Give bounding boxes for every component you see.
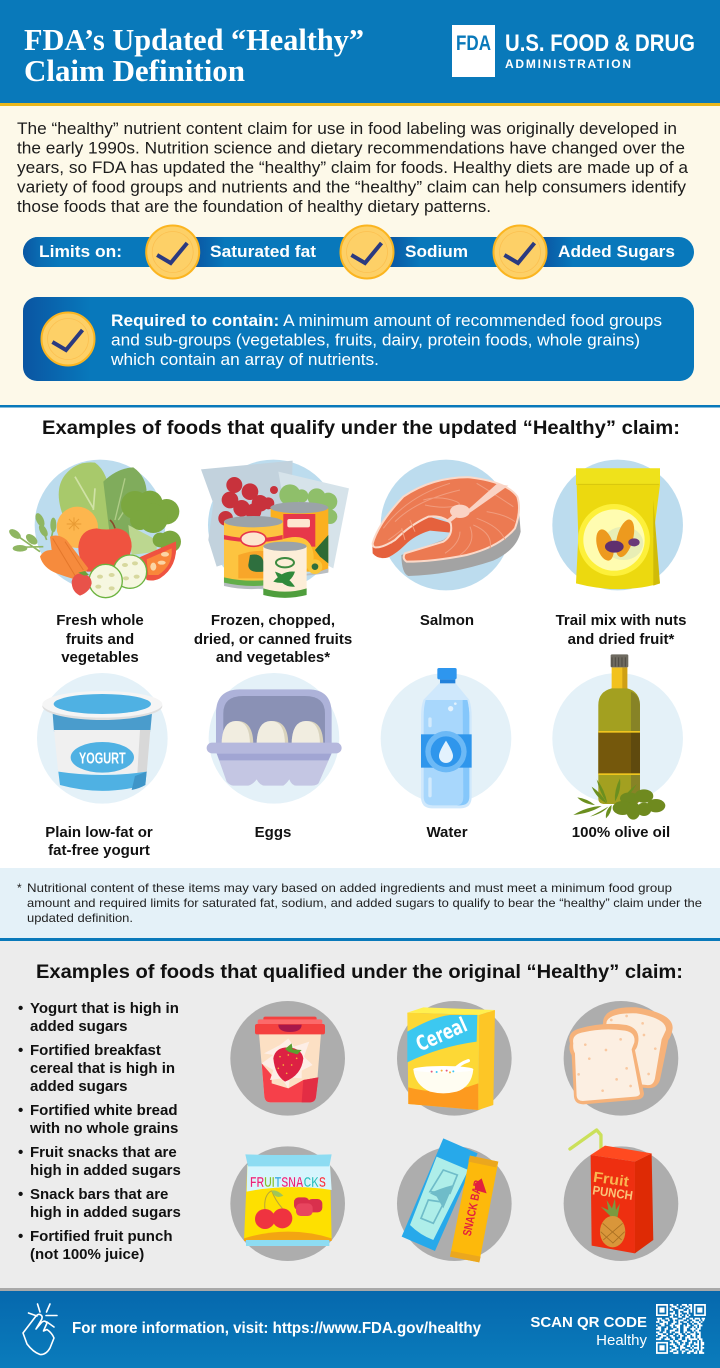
bullet list: • bbox=[18, 1102, 23, 1119]
label: frozen and canned: dried, or canned fruits bbox=[194, 631, 352, 648]
QR caption: SCAN QR CODE bbox=[530, 1314, 647, 1331]
limits bar: Saturated fat bbox=[210, 242, 316, 261]
footnote: Nutritional content of these items may vary based on added ingredients and must meet a minimum food group bbox=[27, 881, 672, 895]
bullet list: high in added sugars bbox=[30, 1162, 181, 1179]
icon: yogurt: YOGURT bbox=[79, 750, 126, 767]
label: yogurt bbox=[45, 824, 153, 859]
FDA logo bbox=[452, 25, 695, 77]
bullet list: • bbox=[18, 1144, 23, 1161]
label: frozen and canned: and vegetables* bbox=[216, 649, 330, 666]
bullet list: Snack bars that are bbox=[30, 1186, 168, 1203]
heading: original claim: Examples of foods that qualified under the original “Healthy” claim: bbox=[36, 961, 683, 983]
icon: olive oil bbox=[552, 654, 683, 820]
heading: updated claim: Examples of foods that qualify under the updated “Healthy” claim: bbox=[42, 417, 680, 439]
label: water: Water bbox=[426, 824, 468, 841]
icon: cereal box: Cereal bbox=[412, 1013, 471, 1056]
small can bbox=[263, 547, 307, 592]
icon: finger snap hand bbox=[23, 1304, 57, 1355]
label: eggs: Eggs bbox=[255, 824, 291, 841]
QR caption bbox=[530, 1314, 648, 1349]
bullet list: • bbox=[18, 1228, 23, 1245]
icon: yogurt bbox=[37, 673, 168, 804]
bullet list: • bbox=[18, 1000, 23, 1017]
icon: cereal box bbox=[397, 1001, 512, 1116]
panel: definition bbox=[0, 106, 720, 405]
icon: check saturated fat bbox=[146, 226, 199, 278]
icon: trail mix bbox=[552, 460, 683, 590]
icon: white bread bbox=[564, 1001, 678, 1116]
FDA logo: FDA bbox=[456, 32, 491, 55]
limits bar bbox=[23, 226, 694, 278]
panel: original healthy foods bbox=[0, 941, 720, 1288]
bullet list: Yogurt that is high in bbox=[30, 1000, 179, 1017]
bullet list: • bbox=[18, 1186, 23, 1203]
limits bar: Added Sugars bbox=[558, 242, 675, 261]
icon: check added sugars bbox=[494, 226, 546, 278]
label: trail mix: and dried fruit* bbox=[568, 631, 674, 648]
icon: sweetened yogurt cup bbox=[230, 1001, 345, 1116]
bullet list: cereal that is high in bbox=[30, 1060, 175, 1077]
required to contain box: and sub-groups (vegetables, fruits, dairy, protein foods, whole grains) bbox=[111, 330, 640, 350]
label: yogurt: Plain low-fat or bbox=[45, 824, 153, 841]
icon: check required bbox=[42, 312, 94, 366]
label: fresh produce: vegetables bbox=[61, 649, 139, 666]
label: salmon: Salmon bbox=[420, 612, 474, 629]
icon: water bottle bbox=[381, 668, 511, 808]
limits bar: Sodium bbox=[405, 242, 468, 261]
label: frozen and canned: Frozen, chopped, bbox=[211, 612, 335, 629]
bullet list: Fortified breakfast bbox=[30, 1042, 161, 1059]
label: trail mix: Trail mix with nuts bbox=[556, 612, 686, 629]
label: fresh produce: Fresh whole bbox=[56, 612, 144, 629]
label: trail mix bbox=[556, 612, 686, 648]
title: Claim Definition bbox=[24, 54, 245, 88]
icon: eggs bbox=[207, 673, 342, 804]
required to contain box: Required to contain: A minimum amount of recommended food groups bbox=[111, 311, 662, 330]
header banner bbox=[0, 0, 720, 106]
icon: frozen and canned produce bbox=[201, 460, 349, 598]
title bbox=[24, 23, 364, 88]
QR caption: Healthy bbox=[596, 1332, 648, 1349]
intro paragraph: years, so FDA has updated the “healthy” claim for foods. Healthy diets are made up of a bbox=[17, 158, 689, 177]
footnote: * bbox=[17, 881, 22, 895]
FDA logo: ADMINISTRATION bbox=[505, 57, 631, 71]
icon: fruit snacks bbox=[230, 1146, 345, 1261]
label: frozen and canned bbox=[194, 612, 352, 666]
bullet list: • bbox=[18, 1042, 23, 1059]
icon: check sodium bbox=[340, 226, 394, 278]
icon: fruit punch box: Fruit bbox=[592, 1170, 630, 1191]
required to contain box bbox=[23, 297, 694, 381]
footnote bbox=[0, 868, 720, 941]
bullet list: (not 100% juice) bbox=[30, 1246, 144, 1263]
limits bar: Limits on: bbox=[39, 242, 122, 261]
icon: snack bars: SNACK BAR bbox=[460, 1179, 485, 1237]
title: FDA’s Updated “Healthy” bbox=[24, 23, 364, 57]
icon: snack bars bbox=[397, 1138, 512, 1262]
icon: fruit snacks: FRUITSNACKS bbox=[250, 1174, 326, 1191]
label: olive oil: 100% olive oil bbox=[572, 824, 670, 841]
bullet list: high in added sugars bbox=[30, 1204, 181, 1221]
more information link: For more information, visit: https://www.FDA.gov/healthy bbox=[72, 1320, 481, 1337]
intro paragraph: those foods that are the foundation of healthy dietary patterns. bbox=[17, 197, 491, 216]
footnote: updated definition. bbox=[27, 911, 133, 925]
footer banner bbox=[0, 1288, 720, 1368]
bullet list: with no whole grains bbox=[29, 1120, 178, 1137]
icon: fruit punch box: PUNCH bbox=[592, 1183, 634, 1203]
QR code bbox=[656, 1305, 705, 1353]
label: fresh produce: fruits and bbox=[66, 631, 134, 648]
intro paragraph: The “healthy” nutrient content claim for use in food labeling was originally developed in bbox=[17, 119, 677, 138]
left can bbox=[224, 522, 283, 585]
intro paragraph: the early 1990s. Nutrition science and dietary recommendations have changed over the bbox=[17, 138, 685, 158]
bullet list: added sugars bbox=[30, 1078, 128, 1095]
icon: fresh fruits and vegetables bbox=[7, 460, 181, 598]
icon: fruit punch box bbox=[564, 1130, 678, 1261]
label: yogurt: fat-free yogurt bbox=[48, 842, 150, 859]
intro paragraph bbox=[17, 119, 689, 216]
back can bbox=[271, 508, 328, 572]
bullet list: Fortified fruit punch bbox=[30, 1228, 172, 1245]
bullet list: Fruit snacks that are bbox=[30, 1144, 177, 1161]
panel: updated healthy foods bbox=[0, 405, 720, 868]
footnote: amount and required limits for saturated fat, sodium, and added sugars to qualify to bear the “healthy” claim under the bbox=[27, 896, 702, 910]
intro paragraph: variety of food groups and nutrients and the “healthy” claim can help consumers identify bbox=[17, 178, 686, 196]
bullet list: added sugars bbox=[30, 1018, 128, 1035]
bullet list bbox=[18, 1000, 181, 1263]
required to contain box: which contain an array of nutrients. bbox=[110, 350, 379, 369]
label: fresh produce bbox=[56, 612, 144, 666]
bullet list: Fortified white bread bbox=[30, 1102, 178, 1119]
icon: salmon bbox=[372, 460, 521, 590]
